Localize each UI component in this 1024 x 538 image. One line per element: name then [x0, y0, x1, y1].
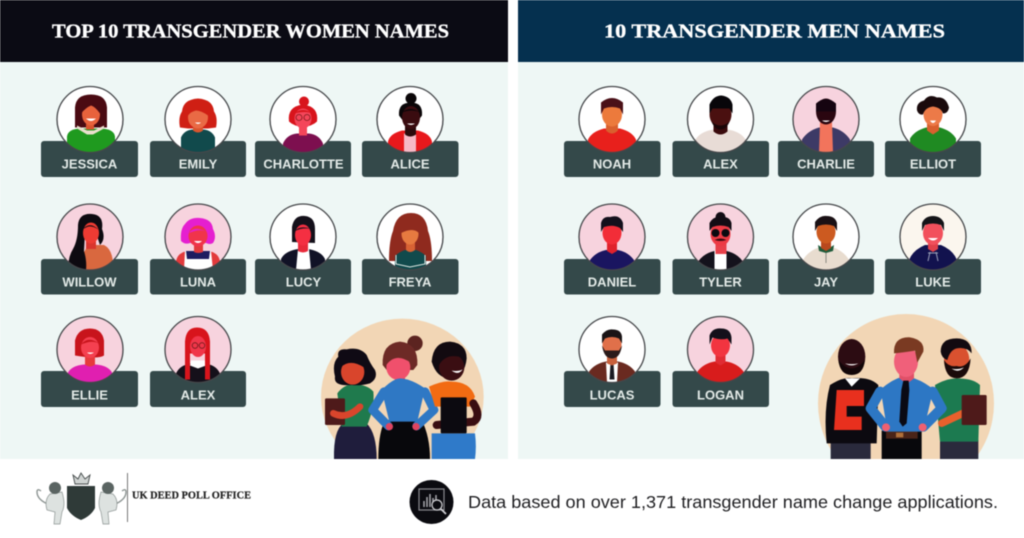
name card: Emily — [150, 86, 246, 177]
wordmark: UK DEED POLL OFFICE — [132, 490, 251, 502]
icon: Elliot avatar — [900, 86, 966, 152]
label: Jessica: JESSICA — [62, 156, 118, 172]
name card: Luke — [885, 204, 981, 294]
label: Emily: EMILY — [179, 156, 218, 172]
icon: Lucy avatar — [270, 204, 336, 270]
name card: Alex (men) — [672, 86, 769, 177]
name card: Jessica — [41, 86, 138, 177]
name card: Willow — [41, 204, 138, 294]
data source note: Data based on over 1,371 transgender name change applications. — [468, 492, 998, 512]
avatar rings — [57, 86, 966, 382]
name card: Charlotte — [255, 86, 351, 177]
label: Willow: WILLOW — [62, 274, 117, 290]
label: Elliot: ELLIOT — [910, 156, 956, 172]
name card: Elliot — [885, 86, 981, 177]
name card: Lucas — [564, 316, 660, 407]
divider — [127, 473, 128, 522]
icon: Charlotte avatar — [270, 86, 336, 152]
label: Luna: LUNA — [180, 274, 217, 290]
icon: Freya avatar — [377, 204, 443, 270]
label: Jay: JAY — [814, 274, 838, 290]
icon: Luke avatar — [900, 204, 966, 270]
icon: Lucas avatar — [579, 316, 645, 382]
name card: Daniel — [564, 204, 660, 294]
label: Lucy: LUCY — [286, 274, 322, 290]
icon: Willow avatar — [57, 204, 123, 270]
label: Ellie: ELLIE — [71, 388, 108, 402]
name card: Luna — [150, 204, 246, 294]
label: Alice: ALICE — [390, 156, 430, 172]
icon: Alex avatar (women) — [165, 316, 231, 382]
header bar: men — [518, 0, 1024, 62]
name card: Tyler — [672, 204, 769, 294]
label: Charlotte: CHARLOTTE — [263, 156, 344, 172]
right lion — [99, 482, 126, 524]
icon: Daniel avatar — [579, 204, 645, 270]
icon: Logan avatar — [688, 316, 754, 382]
name card: Ellie — [41, 316, 138, 407]
name card: Alice — [362, 86, 458, 177]
name card: Freya — [362, 204, 458, 294]
icon: Alex avatar (men) — [688, 86, 754, 152]
heading: women: TOP 10 TRANSGENDER WOMEN NAMES — [52, 20, 449, 42]
name card: Lucy — [255, 204, 351, 294]
label: Freya: FREYA — [389, 274, 432, 290]
name card: Charlie — [778, 86, 874, 177]
icon: Charlie avatar — [793, 86, 859, 152]
label: Lucas: LUCAS — [590, 388, 635, 402]
icon: Ellie avatar — [57, 316, 123, 382]
label: Charlie: CHARLIE — [797, 156, 855, 172]
icon: Jay avatar — [793, 204, 859, 270]
name card: Logan — [672, 316, 769, 407]
shield — [67, 486, 95, 520]
label: Alex (women): ALEX — [181, 388, 216, 402]
header bar: women — [0, 0, 508, 62]
name card: Alex (women) — [150, 316, 246, 407]
label: Alex (men): ALEX — [703, 156, 738, 172]
illustration: group of three women — [321, 319, 484, 475]
name card: Noah — [564, 86, 660, 177]
heading: men: 10 TRANSGENDER MEN NAMES — [604, 20, 945, 42]
label: Luke: LUKE — [915, 274, 951, 290]
label: Logan: LOGAN — [697, 388, 744, 402]
icon: Noah avatar — [579, 86, 645, 152]
panel: transgender men names — [518, 0, 1024, 493]
crown — [73, 473, 90, 484]
icon: Jessica avatar — [57, 86, 123, 152]
label: Daniel: DANIEL — [588, 274, 636, 290]
panel: transgender women names — [0, 0, 508, 475]
illustration: group of three men — [818, 314, 994, 493]
icon: Luna avatar — [165, 204, 231, 270]
label: Noah: NOAH — [593, 156, 631, 172]
icon: data analysis — [410, 480, 454, 524]
icon: crest — [37, 473, 126, 524]
icon: Tyler avatar — [688, 204, 754, 270]
label: Tyler: TYLER — [699, 274, 742, 290]
icon: Alice avatar — [377, 86, 443, 152]
logo: UK Deed Poll Office — [37, 473, 251, 524]
icon: Emily avatar — [165, 86, 231, 152]
left lion — [37, 482, 64, 524]
name card: Jay — [778, 204, 874, 294]
